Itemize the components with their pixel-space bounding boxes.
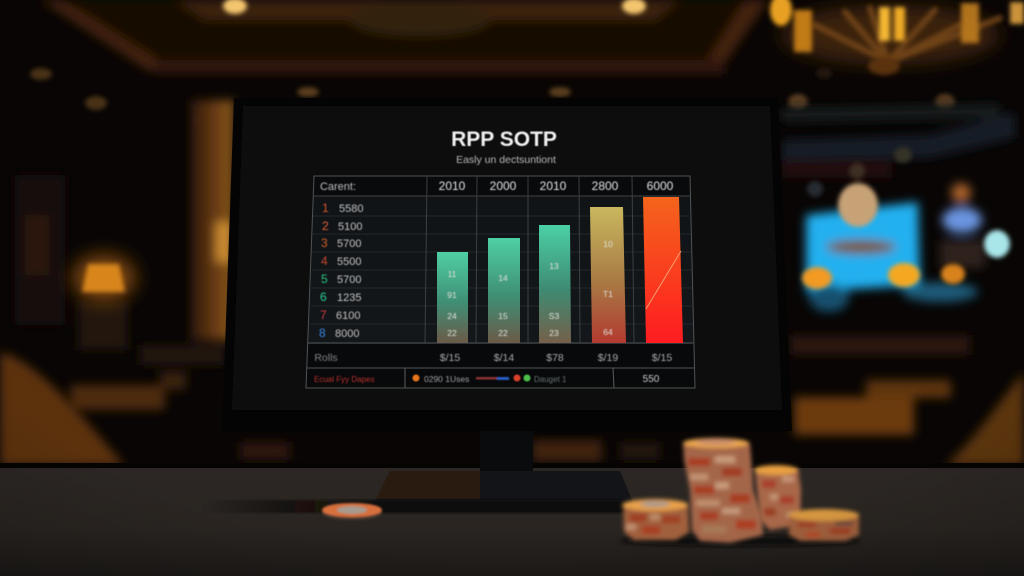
chart table (306, 176, 695, 388)
bar values: 10 (603, 239, 613, 249)
right room: dark blue bands (782, 104, 1015, 435)
single flat chip (322, 503, 382, 520)
small right stack (754, 465, 801, 530)
grid lines (306, 176, 695, 388)
ceiling lights (30, 0, 955, 128)
bar values: 24 (447, 311, 457, 321)
totals row: Rolls (314, 352, 338, 364)
header labels: 2800 (592, 179, 619, 193)
table surface (0, 463, 1024, 576)
subtitle: Easly un dectsuntiont (456, 154, 556, 166)
bar values (447, 239, 613, 338)
row numbers and values: 5700 (337, 274, 361, 286)
row numbers and values: 1235 (337, 292, 361, 304)
bar values: S3 (549, 311, 559, 321)
row numbers and values: 5580 (339, 203, 363, 215)
right chair (945, 372, 1024, 466)
row numbers and values: 8000 (335, 328, 359, 340)
totals row: $/19 (598, 352, 618, 364)
bar values: 22 (447, 328, 457, 338)
lamp glow (72, 254, 136, 302)
header labels: 2000 (490, 179, 517, 193)
bar values: 64 (603, 327, 613, 337)
legend row (314, 374, 660, 385)
row numbers and values: 6 (320, 290, 327, 304)
poker chips (322, 438, 860, 546)
header labels: 2010 (540, 179, 567, 193)
bar values: 15 (498, 311, 508, 321)
monitor (222, 98, 792, 431)
bar values: 14 (498, 273, 508, 283)
lamp shade (82, 264, 125, 292)
bar values: 91 (447, 290, 457, 300)
row numbers and values: 5 (321, 272, 328, 286)
bar values: 11 (448, 269, 457, 279)
left wall and lamp (15, 100, 234, 410)
header labels: 6000 (647, 179, 674, 193)
title: RPP SOTP (451, 128, 557, 151)
header labels: Carent: (320, 181, 356, 193)
row numbers and values: 5500 (337, 256, 361, 268)
row numbers and values (319, 201, 363, 340)
row numbers and values: 7 (320, 308, 327, 322)
header labels: 2010 (439, 179, 466, 193)
monitor stand (200, 428, 632, 513)
row numbers and values: 5700 (337, 238, 361, 250)
row numbers and values: 4 (321, 254, 328, 268)
front left stack (622, 499, 689, 540)
bar values: 22 (498, 328, 508, 338)
strip behind table (240, 440, 660, 462)
chandelier (770, 0, 1024, 79)
header labels (320, 179, 674, 193)
bar values: T1 (603, 289, 613, 299)
front right stack (789, 509, 859, 541)
legend row: Ecual Fyy Dapes (314, 375, 374, 384)
tall stack (683, 438, 763, 543)
bar values: 23 (549, 328, 559, 338)
row numbers and values: 5100 (338, 221, 362, 233)
legend row: 0290 1Uses (424, 374, 469, 384)
bar values: 13 (549, 261, 559, 271)
totals row: $/15 (652, 352, 672, 364)
chip shadows (620, 536, 860, 546)
right screens (806, 183, 985, 312)
row numbers and values: 3 (321, 236, 328, 250)
totals row: $/14 (494, 352, 514, 364)
legend row: 550 (643, 374, 660, 385)
left chair (0, 352, 125, 466)
row numbers and values: 2 (322, 219, 329, 233)
bars (437, 197, 683, 343)
row numbers and values: 6100 (336, 310, 360, 322)
legend row: Dauget 1 (534, 375, 567, 384)
totals row: $/15 (440, 352, 460, 364)
ceiling (40, 0, 770, 74)
row numbers and values: 1 (322, 201, 329, 215)
totals row (314, 352, 672, 364)
row numbers and values: 8 (319, 326, 326, 340)
totals row: $78 (546, 352, 564, 364)
